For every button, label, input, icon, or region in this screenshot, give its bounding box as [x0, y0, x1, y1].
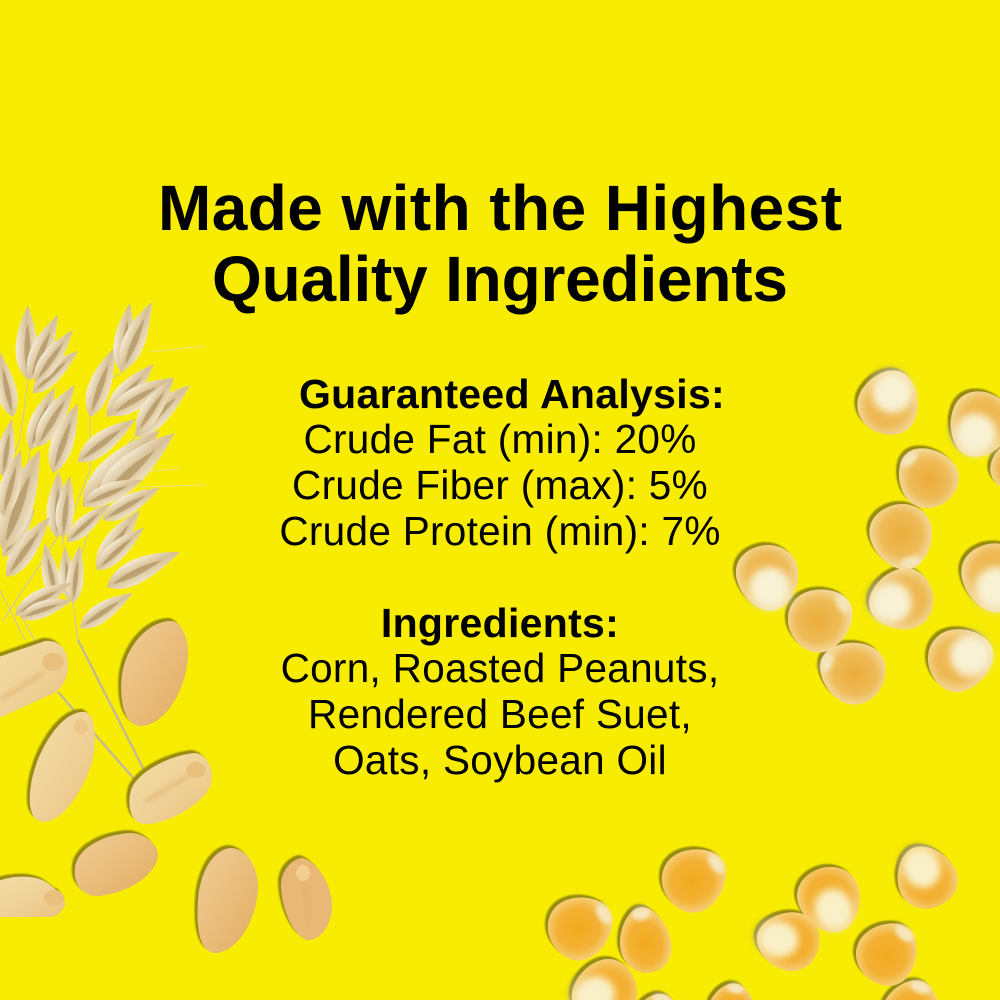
- text block: guaranteed analysis: [279, 371, 725, 554]
- illustration: oat stalks: [0, 297, 205, 780]
- text block: guaranteed analysis: Crude Fiber (max): 5%: [292, 462, 708, 508]
- text block: ingredients: Corn, Roasted Peanuts,: [281, 645, 719, 691]
- text block: guaranteed analysis: Crude Protein (min): 7%: [279, 508, 721, 554]
- illustration: corn kernels right: [732, 361, 1000, 714]
- title: [158, 172, 842, 315]
- illustration: peanuts: [0, 621, 332, 953]
- text block: guaranteed analysis: Crude Fat (min): 20%: [303, 416, 697, 462]
- text block: ingredients: [281, 600, 719, 783]
- text block: ingredients: Oats, Soybean Oil: [333, 737, 667, 783]
- text block: guaranteed analysis: Guaranteed Analysis:: [299, 371, 725, 417]
- text block: ingredients: Rendered Beef Suet,: [308, 691, 692, 737]
- title: Quality Ingredients: [212, 243, 788, 315]
- title: Made with the Highest: [158, 172, 842, 244]
- text block: ingredients: Ingredients:: [381, 600, 619, 646]
- illustration: corn kernels bottom: [537, 835, 966, 1000]
